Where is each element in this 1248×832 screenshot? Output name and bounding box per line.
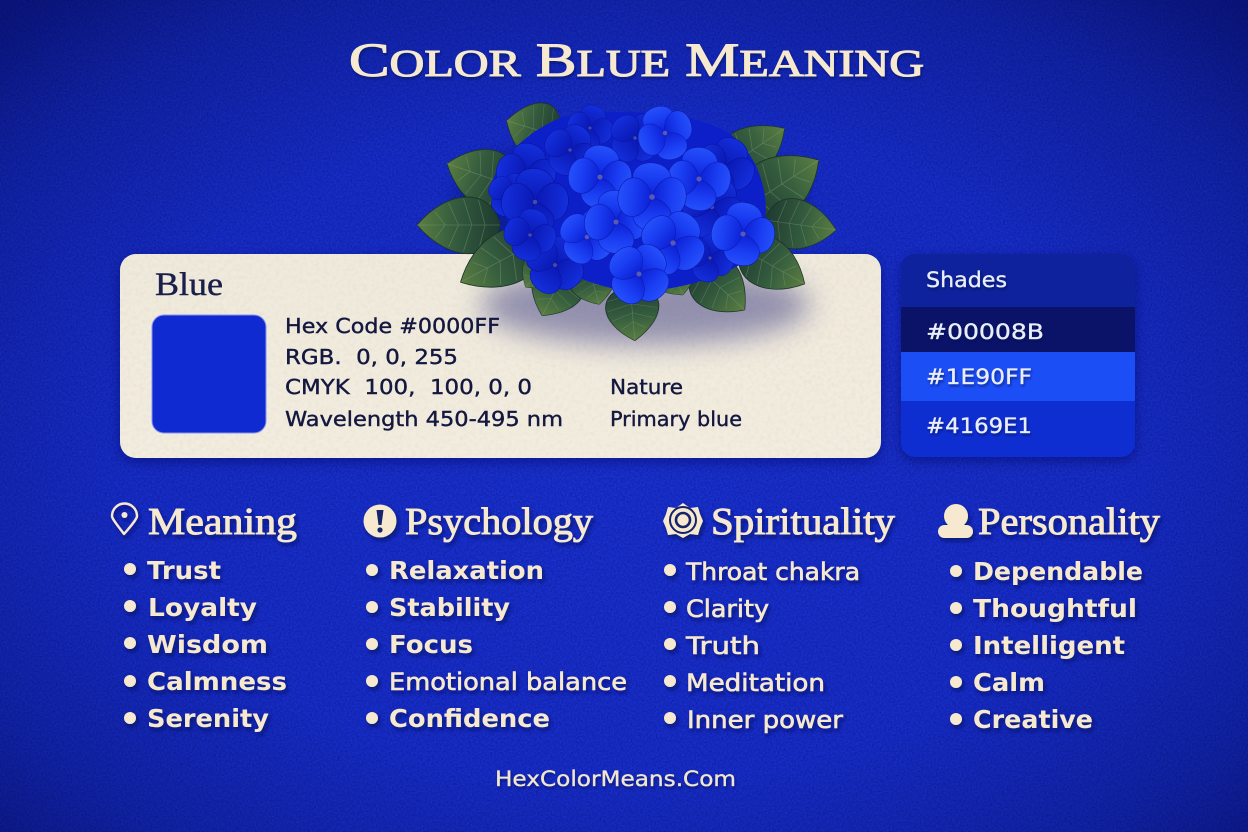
icon: person: [938, 504, 973, 538]
panel: blue colour card: [120, 254, 881, 458]
front florets: [548, 97, 779, 319]
shade labels: [926, 268, 1044, 438]
panel: shades: [901, 254, 1135, 457]
shade labels: #00008B: [926, 320, 1044, 344]
heading: psychology: Psychology: [405, 501, 593, 543]
colour specifications: RGB. 0, 0, 255: [285, 345, 458, 369]
column: spirituality: [663, 501, 895, 734]
colour swatch: [152, 315, 266, 433]
list: psychology: [366, 556, 627, 733]
footer: website: HexColorMeans.Com: [495, 767, 736, 791]
shade labels: #4169E1: [926, 414, 1032, 438]
column: psychology: [364, 501, 627, 733]
list: spirituality: Clarity: [686, 595, 769, 623]
colour specifications: Wavelength 450-495 nm: [285, 407, 563, 431]
leaves: [417, 94, 840, 343]
heading: personality: Personality: [978, 501, 1160, 543]
list: spirituality: Truth: [685, 632, 760, 660]
list: personality: Calm: [973, 668, 1045, 697]
list: psychology: Stability: [389, 593, 510, 622]
list: meaning: Calmness: [147, 667, 287, 696]
colour specifications: Hex Code #0000FF: [285, 314, 500, 338]
flower cluster base: [490, 112, 766, 291]
list: personality: Intelligent: [973, 631, 1125, 660]
list: spirituality: Inner power: [687, 706, 843, 734]
back florets: [479, 99, 765, 307]
list: spirituality: Meditation: [686, 669, 825, 697]
list: psychology: Relaxation: [389, 556, 544, 585]
icon: exclamation badge: [364, 504, 396, 538]
icon: chakra sun: [663, 503, 703, 538]
colour specifications: Primary blue: [610, 407, 742, 431]
shade labels: Shades: [926, 268, 1007, 292]
list: meaning: Loyalty: [148, 593, 257, 622]
list: spirituality: Throat chakra: [685, 558, 860, 586]
heading: spirituality: Spirituality: [711, 501, 895, 543]
list: psychology: Focus: [389, 630, 473, 659]
column: meaning: [112, 501, 297, 733]
icon: map pin: [112, 504, 137, 534]
list: personality: Dependable: [973, 557, 1143, 586]
flower: blue hydrangea with green leaves: [417, 94, 840, 343]
list: meaning: Wisdom: [147, 630, 268, 659]
title: COLOR B LUE M EANING: [349, 34, 924, 87]
card heading: Blue: [155, 267, 223, 303]
list: meaning: Serenity: [147, 704, 269, 733]
list: personality: Thoughtful: [973, 594, 1137, 623]
list: meaning: [124, 556, 287, 733]
colour specifications: CMYK 100, 100, 0, 0: [285, 375, 532, 399]
flower cast shadow on card: [480, 265, 810, 345]
column: personality: [938, 501, 1160, 734]
list: psychology: Confidence: [389, 704, 550, 733]
list: meaning: Trust: [147, 556, 221, 585]
shade labels: #1E90FF: [926, 365, 1032, 389]
heading: meaning: Meaning: [148, 501, 297, 543]
colour specifications: [285, 314, 742, 431]
list: spirituality: [664, 558, 860, 734]
shade rows: [901, 307, 1135, 457]
list: psychology: Emotional balance: [389, 668, 627, 696]
list: personality: Creative: [973, 705, 1093, 734]
colour specifications: Nature: [610, 375, 683, 399]
list: personality: [950, 557, 1143, 734]
